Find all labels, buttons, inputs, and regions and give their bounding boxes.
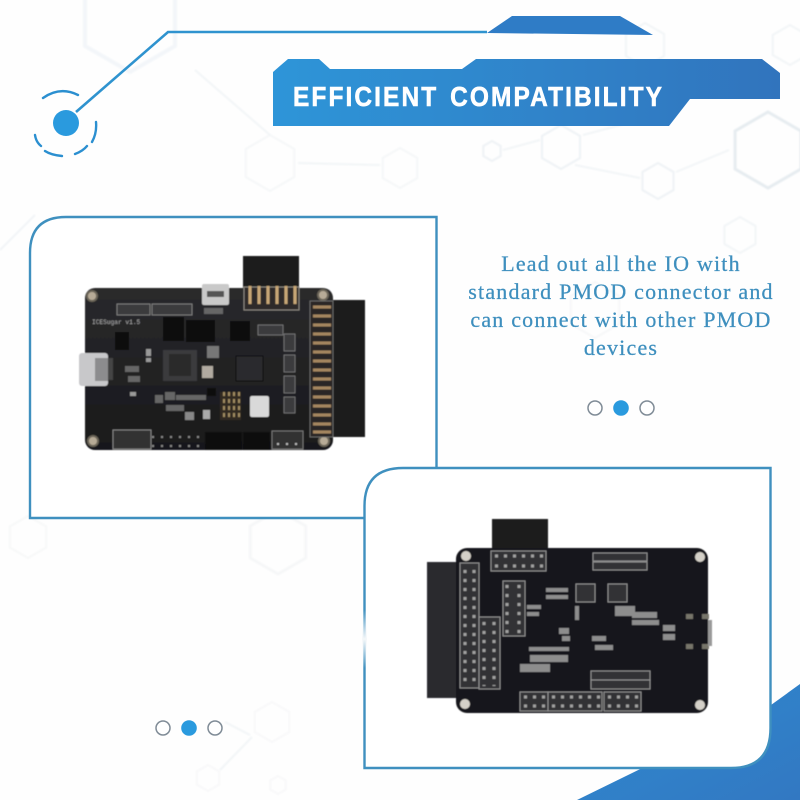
- solder pads: [465, 556, 640, 706]
- pagination dots: lower: [156, 720, 222, 736]
- left connector housing: [427, 562, 461, 698]
- mounting holes: [87, 290, 329, 446]
- right connector housing: [330, 300, 365, 437]
- right pin header: [310, 301, 333, 437]
- small components: [125, 346, 219, 420]
- icon: target dot with dashed ring: [35, 91, 96, 156]
- right side jumpers: [258, 325, 295, 413]
- USB pads: [686, 614, 712, 649]
- silkscreen labels: [117, 304, 192, 315]
- panel: top photo frame: [30, 217, 436, 518]
- product photo: board back: [427, 519, 712, 713]
- text block: description: devices: [584, 335, 658, 360]
- small components: [520, 588, 675, 672]
- product photo: board front: [79, 256, 365, 450]
- connector line with top tab: [76, 16, 653, 112]
- top pin header: [244, 286, 299, 310]
- text block: description: can connect with other PMOD: [470, 307, 772, 332]
- circuit board front: [85, 288, 333, 450]
- top connector housing: [243, 256, 299, 292]
- circuit board back: [456, 548, 708, 713]
- pagination dots: upper: [588, 400, 654, 416]
- USB-C port: [79, 353, 113, 386]
- inductors and chips: [115, 317, 250, 350]
- main chip: [163, 350, 263, 381]
- top connector housing: [492, 519, 548, 553]
- frame highlight fade: [362, 610, 367, 668]
- silkscreen header blocks: [460, 551, 650, 711]
- DIP switch: [220, 392, 241, 420]
- text block: description: [468, 251, 774, 360]
- micro USB port: [202, 284, 229, 314]
- text block: description: Lead out all the IO with: [501, 251, 741, 276]
- title banner: [273, 59, 780, 126]
- text block: description: standard PMOD connector and: [468, 279, 774, 304]
- title: EFFICIENT COMPATIBILITY: [293, 81, 662, 112]
- board version text: ICESugar v1.5: [92, 319, 141, 326]
- RGB LED: [250, 396, 269, 417]
- bottom header row: [113, 430, 303, 450]
- decorative blue corner: [577, 684, 800, 800]
- mounting holes: [460, 551, 705, 710]
- panel: bottom photo frame: [364, 468, 770, 768]
